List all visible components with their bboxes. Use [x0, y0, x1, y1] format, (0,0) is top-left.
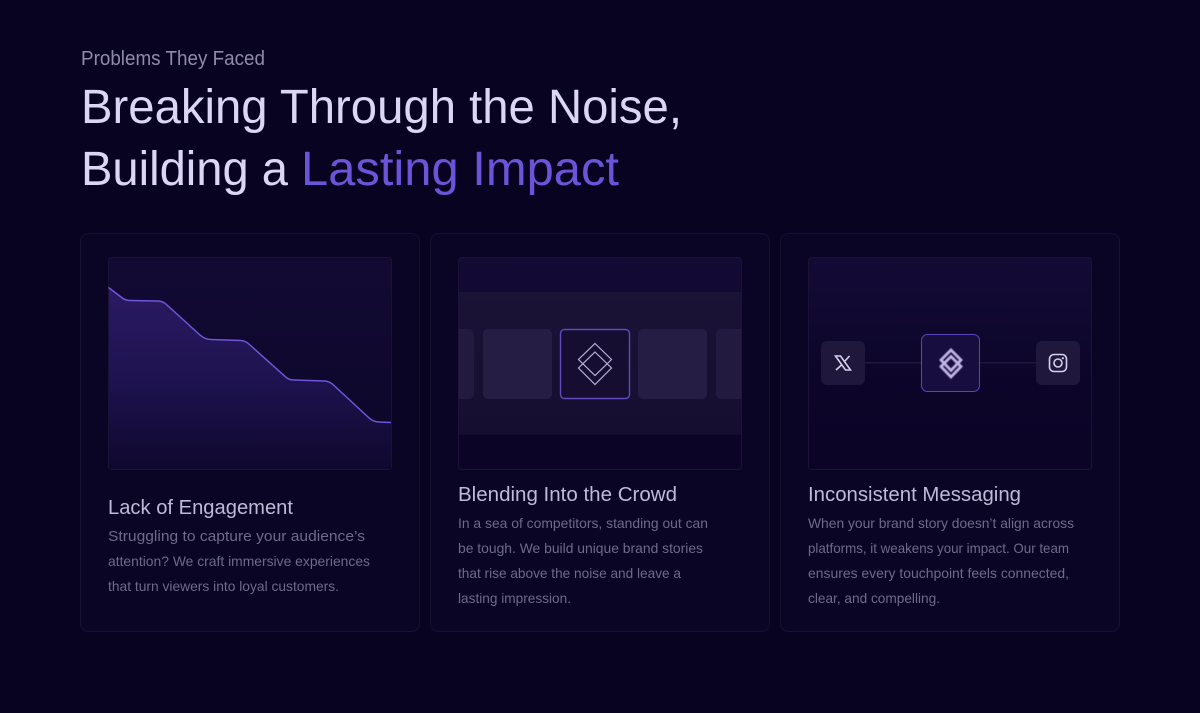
- card body: When your brand story doesn’t align across: [808, 515, 1074, 531]
- chart: declining engagement: [108, 258, 392, 470]
- panel: lack of engagement: [80, 234, 420, 632]
- card body: that turn viewers into loyal customers.: [108, 578, 339, 594]
- header: [81, 48, 682, 196]
- card body: platforms, it weakens your impact. Our team: [808, 540, 1069, 556]
- logo tile: [922, 334, 980, 392]
- eyebrow: Problems They Faced: [81, 48, 265, 70]
- icon: Instagram tile: [1036, 341, 1080, 385]
- illustration: connected platforms: [808, 258, 1092, 470]
- card body: [108, 528, 370, 594]
- card title: Blending Into the Crowd: [458, 484, 677, 506]
- card body: lasting impression.: [458, 590, 571, 606]
- icon: layered diamonds: [578, 344, 612, 384]
- card body: [808, 515, 1074, 606]
- illustration: logo among tiles: [458, 257, 742, 470]
- panel: blending into the crowd: [430, 234, 785, 632]
- card title: Inconsistent Messaging: [808, 484, 1021, 506]
- card title: Lack of Engagement: [108, 497, 293, 519]
- title: Lasting Impact: [301, 143, 619, 196]
- card body: ensures every touchpoint feels connected,: [808, 565, 1069, 581]
- title: Building a: [81, 143, 288, 196]
- card body: that rise above the noise and leave a: [458, 565, 681, 581]
- card body: [458, 515, 708, 606]
- card body: clear, and compelling.: [808, 590, 940, 606]
- card body: attention? We craft immersive experiences: [108, 553, 370, 569]
- title: [81, 81, 682, 196]
- title: Breaking Through the Noise,: [81, 81, 682, 134]
- card body: be tough. We build unique brand stories: [458, 540, 703, 556]
- highlighted logo tile: [560, 330, 630, 398]
- card body: In a sea of competitors, standing out can: [458, 515, 708, 531]
- panel: inconsistent messaging: [780, 234, 1120, 632]
- icon: X tile: [821, 341, 865, 385]
- card body: Struggling to capture your audience’s: [108, 528, 365, 545]
